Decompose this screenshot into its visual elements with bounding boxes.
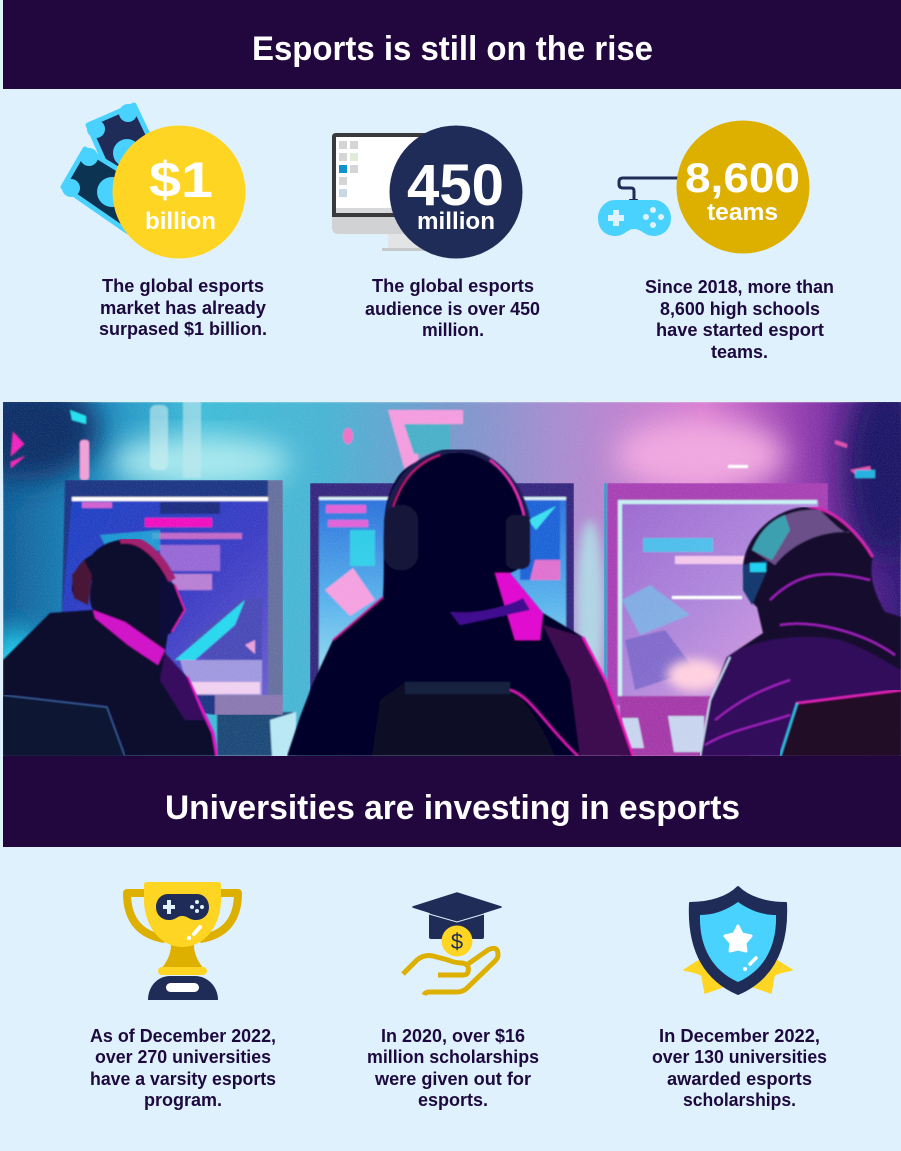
text block: global market: market has already xyxy=(100,298,266,318)
heading band: Universities are investing in esports xyxy=(3,756,901,847)
icon: desktop monitor xyxy=(332,133,462,251)
right chair xyxy=(780,690,901,756)
text block: scholarships given: In 2020, over $16 xyxy=(381,1026,525,1046)
text block: scholarships given: esports. xyxy=(418,1090,488,1110)
text block: varsity programs: over 270 universities xyxy=(95,1047,271,1067)
text block: universities awarding scholarships: In December 2022, xyxy=(659,1026,820,1046)
text block: high school teams: Since 2018, more than xyxy=(645,277,834,297)
text block: scholarships given xyxy=(367,1026,539,1110)
text block: global market: surpased $1 billion. xyxy=(99,319,267,339)
left chair xyxy=(3,695,125,756)
text block: global market xyxy=(99,276,267,339)
left gamer xyxy=(3,539,217,756)
text block: varsity programs xyxy=(90,1026,276,1110)
badge: $1 billion xyxy=(112,126,246,258)
icon: game controller with cord xyxy=(598,178,680,236)
heading band: Esports is still on the rise: Esports is still on the rise xyxy=(252,30,653,68)
text block: varsity programs: As of December 2022, xyxy=(90,1026,276,1046)
middle monitor xyxy=(310,483,574,713)
film grain overlay xyxy=(3,402,901,756)
text block: universities awarding scholarships xyxy=(652,1026,827,1110)
badge: 450 million xyxy=(390,126,522,258)
text block: global market: The global esports xyxy=(102,276,264,296)
text block: global audience: audience is over 450 xyxy=(365,299,540,319)
icon: graduation cap, coin and hand: $ xyxy=(451,929,463,954)
text block: high school teams xyxy=(645,277,834,362)
text block: varsity programs: program. xyxy=(144,1090,222,1110)
right monitor xyxy=(604,483,828,756)
icon: money bills xyxy=(62,104,172,232)
badge: 8,600 teams: teams xyxy=(707,199,778,226)
badge: 8,600 teams: 8,600 xyxy=(685,154,800,201)
text block: global audience xyxy=(365,276,540,340)
text block: scholarships given: were given out for xyxy=(374,1069,531,1089)
stat: 8,600 teams xyxy=(598,120,810,254)
stat: 450 million xyxy=(332,126,522,258)
photo: gamers at neon monitors xyxy=(0,380,901,756)
heading band: Esports is still on the rise xyxy=(3,0,901,89)
badge: 450 million: 450 xyxy=(407,153,504,218)
text block: universities awarding scholarships: over 130 universities xyxy=(652,1047,827,1067)
stat: $1 billion xyxy=(62,104,246,258)
left monitor xyxy=(60,480,283,715)
badge: $1 billion: billion xyxy=(145,208,216,235)
text block: scholarships given: million scholarships xyxy=(367,1047,539,1067)
text block: universities awarding scholarships: awarded esports xyxy=(667,1069,812,1089)
text block: high school teams: 8,600 high schools xyxy=(660,299,820,319)
heading band: Universities are investing in esports: Universities are investing in esports xyxy=(165,789,740,827)
icon: shield with star xyxy=(684,887,792,994)
text block: global audience: million. xyxy=(422,320,484,340)
badge: $1 billion: $1 xyxy=(149,152,213,208)
text block: high school teams: have started esport xyxy=(656,320,824,340)
text block: universities awarding scholarships: scholarships. xyxy=(683,1090,796,1110)
badge: 450 million: million xyxy=(417,208,495,235)
text block: high school teams: teams. xyxy=(711,342,768,362)
text block: global audience: The global esports xyxy=(372,276,534,296)
icon: graduation cap, coin and hand xyxy=(403,893,501,995)
room background glow xyxy=(0,380,901,756)
icon: trophy with controller xyxy=(127,882,238,1000)
badge: 8,600 teams xyxy=(676,120,810,254)
middle gamer with headset xyxy=(287,450,633,756)
right gamer in hood xyxy=(700,507,901,756)
text block: varsity programs: have a varsity esports xyxy=(90,1069,276,1089)
